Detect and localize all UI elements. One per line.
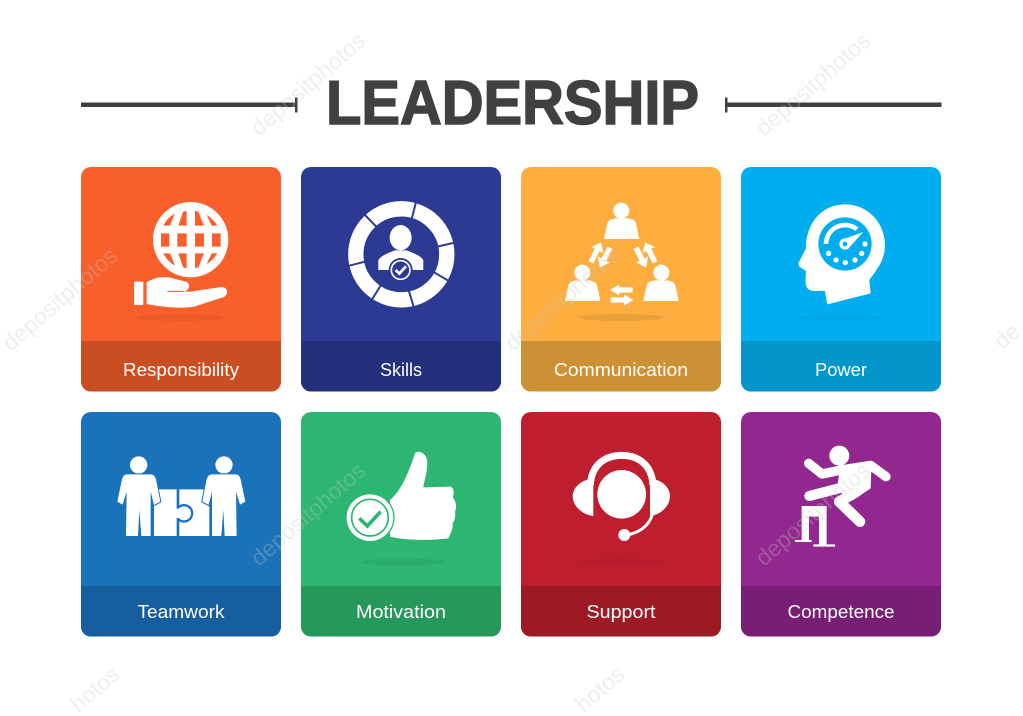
label: Teamwork <box>138 602 226 622</box>
label: Competence <box>788 602 894 622</box>
label: Responsibility <box>123 360 239 380</box>
panel: Communication <box>521 167 721 392</box>
label: Support <box>586 602 656 622</box>
heading: LEADERSHIP <box>326 69 699 138</box>
watermarks: depositphotos <box>245 27 370 141</box>
label band <box>741 341 941 392</box>
ground shadow <box>138 314 224 321</box>
ground shadow <box>578 314 664 321</box>
ground shadow <box>579 558 663 566</box>
left rule <box>81 98 298 112</box>
watermarks: hotos <box>570 661 630 716</box>
icon: two people joining puzzle pieces <box>117 456 245 536</box>
label band <box>521 586 721 636</box>
label band <box>301 586 501 636</box>
watermarks: depositphotos <box>245 457 370 571</box>
panel: Support <box>521 412 721 636</box>
label: Power <box>815 360 867 380</box>
icon: hand holding globe <box>134 202 228 308</box>
label: Motivation <box>356 602 446 622</box>
label band <box>81 586 281 636</box>
label band <box>301 341 501 392</box>
panel: Skills <box>301 167 501 392</box>
watermarks: hotos <box>65 661 125 716</box>
panel: Competence <box>741 412 941 636</box>
label band <box>81 341 281 392</box>
icon: headset agent <box>573 455 670 541</box>
label: Communication <box>554 360 688 380</box>
ground shadow <box>798 314 884 320</box>
title: LEADERSHIP with side rules <box>81 69 942 138</box>
ground shadow <box>361 558 445 566</box>
panel: Power <box>741 167 941 392</box>
icon: head with gauge <box>798 204 885 304</box>
right rule <box>725 98 942 112</box>
label: Skills <box>380 360 422 380</box>
watermarks: depositphotos <box>499 242 624 356</box>
watermarks: depositphotos <box>750 457 875 571</box>
label band <box>521 341 721 392</box>
icon: three people exchanging arrows <box>565 203 679 306</box>
icon: thumbs up with check badge <box>345 452 456 542</box>
icon: runner jumping hurdle <box>795 446 886 547</box>
watermarks: depositphotos <box>750 27 875 141</box>
panel: Responsibility <box>81 167 281 392</box>
label band <box>741 586 941 636</box>
panel: Teamwork <box>81 412 281 636</box>
panel: Motivation <box>301 412 501 636</box>
watermarks: depositphotos <box>0 242 122 356</box>
icon: segmented ring with person <box>347 202 456 308</box>
